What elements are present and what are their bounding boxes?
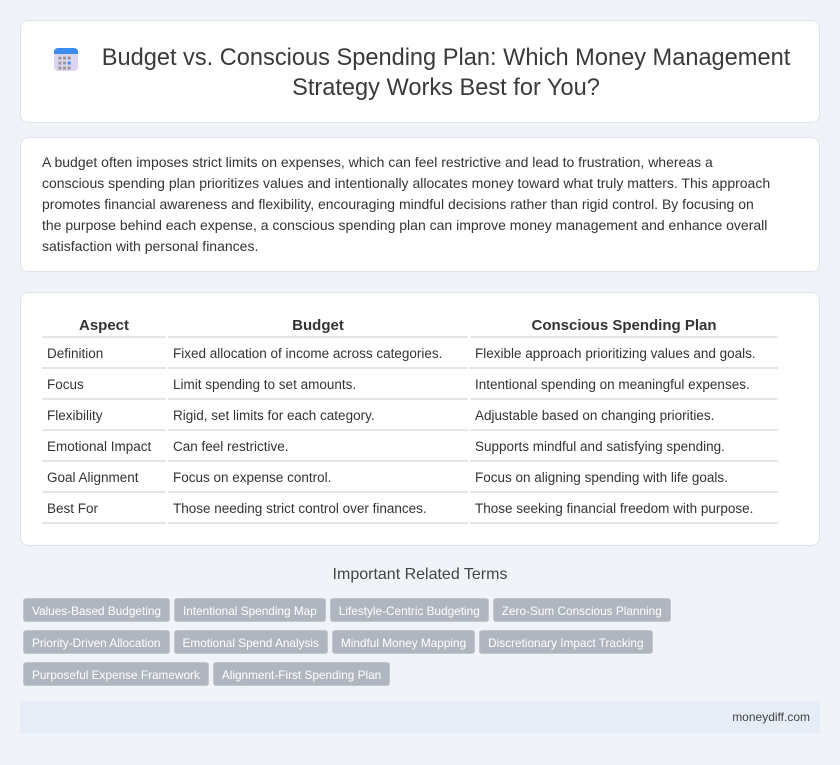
comparison table: Supports mindful and satisfying spending. xyxy=(475,439,725,454)
comparison table: Budget xyxy=(292,316,344,334)
icon: calendar: ■■■ xyxy=(58,61,72,67)
comparison table: Those needing strict control over finances. xyxy=(173,501,427,516)
related term tags: Priority-Driven Allocation xyxy=(32,636,160,650)
icon: calendar xyxy=(54,48,78,71)
related term tags xyxy=(23,598,671,686)
intro text: A budget often imposes strict limits on expenses, which can feel restrictive and lead to frustration, whereas a conscious spending plan prioritizes values and intentionally allocates money toward what truly matters. This approach promotes financial awareness and flexibility, encouraging mindful decisions rather than rigid control. By focusing on the purpose behind each expense, a conscious spending plan can improve money management and enhance overall satisfaction with personal finances. xyxy=(42,154,770,254)
comparison table: Emotional Impact xyxy=(47,439,151,454)
related terms heading: Important Related Terms xyxy=(333,566,507,583)
related term tags: Values-Based Budgeting xyxy=(32,604,161,618)
comparison table: Focus xyxy=(47,377,84,392)
comparison table: Can feel restrictive. xyxy=(173,439,289,454)
related term tags: Mindful Money Mapping xyxy=(341,636,466,650)
comparison table: Flexibility xyxy=(47,408,103,423)
comparison table: Fixed allocation of income across categories. xyxy=(173,346,442,361)
icon: calendar: ■■■ xyxy=(58,56,72,62)
footer xyxy=(20,701,820,734)
comparison table: Limit spending to set amounts. xyxy=(173,377,356,392)
comparison table: Focus on expense control. xyxy=(173,470,331,485)
comparison table: Adjustable based on changing priorities. xyxy=(475,408,714,423)
related term tags: Alignment-First Spending Plan xyxy=(222,668,381,682)
comparison table: Flexible approach prioritizing values and goals. xyxy=(475,346,756,361)
comparison table: Best For xyxy=(47,501,98,516)
related term tags: Discretionary Impact Tracking xyxy=(488,636,644,650)
comparison table: Goal Alignment xyxy=(47,470,139,485)
related term tags: Lifestyle-Centric Budgeting xyxy=(339,604,480,618)
comparison table: Rigid, set limits for each category. xyxy=(173,408,375,423)
title: Budget vs. Conscious Spending Plan: Which Money Management Strategy Works Best for You? xyxy=(102,45,790,101)
related term tags: Purposeful Expense Framework xyxy=(32,668,200,682)
comparison table: Conscious Spending Plan xyxy=(531,316,717,334)
comparison table: Aspect xyxy=(79,316,129,334)
related term tags: Emotional Spend Analysis xyxy=(182,636,319,650)
related term tags: Zero-Sum Conscious Planning xyxy=(502,604,662,618)
comparison table: Those seeking financial freedom with purpose. xyxy=(475,501,753,516)
comparison table: Focus on aligning spending with life goals. xyxy=(475,470,728,485)
comparison table xyxy=(42,316,778,524)
table card xyxy=(20,292,820,546)
intro card xyxy=(20,137,820,272)
related term tags: Intentional Spending Map xyxy=(183,604,317,618)
comparison table: Intentional spending on meaningful expenses. xyxy=(475,377,750,392)
footer source: moneydiff.com xyxy=(732,710,810,724)
comparison table: Definition xyxy=(47,346,103,361)
header card xyxy=(20,20,820,123)
